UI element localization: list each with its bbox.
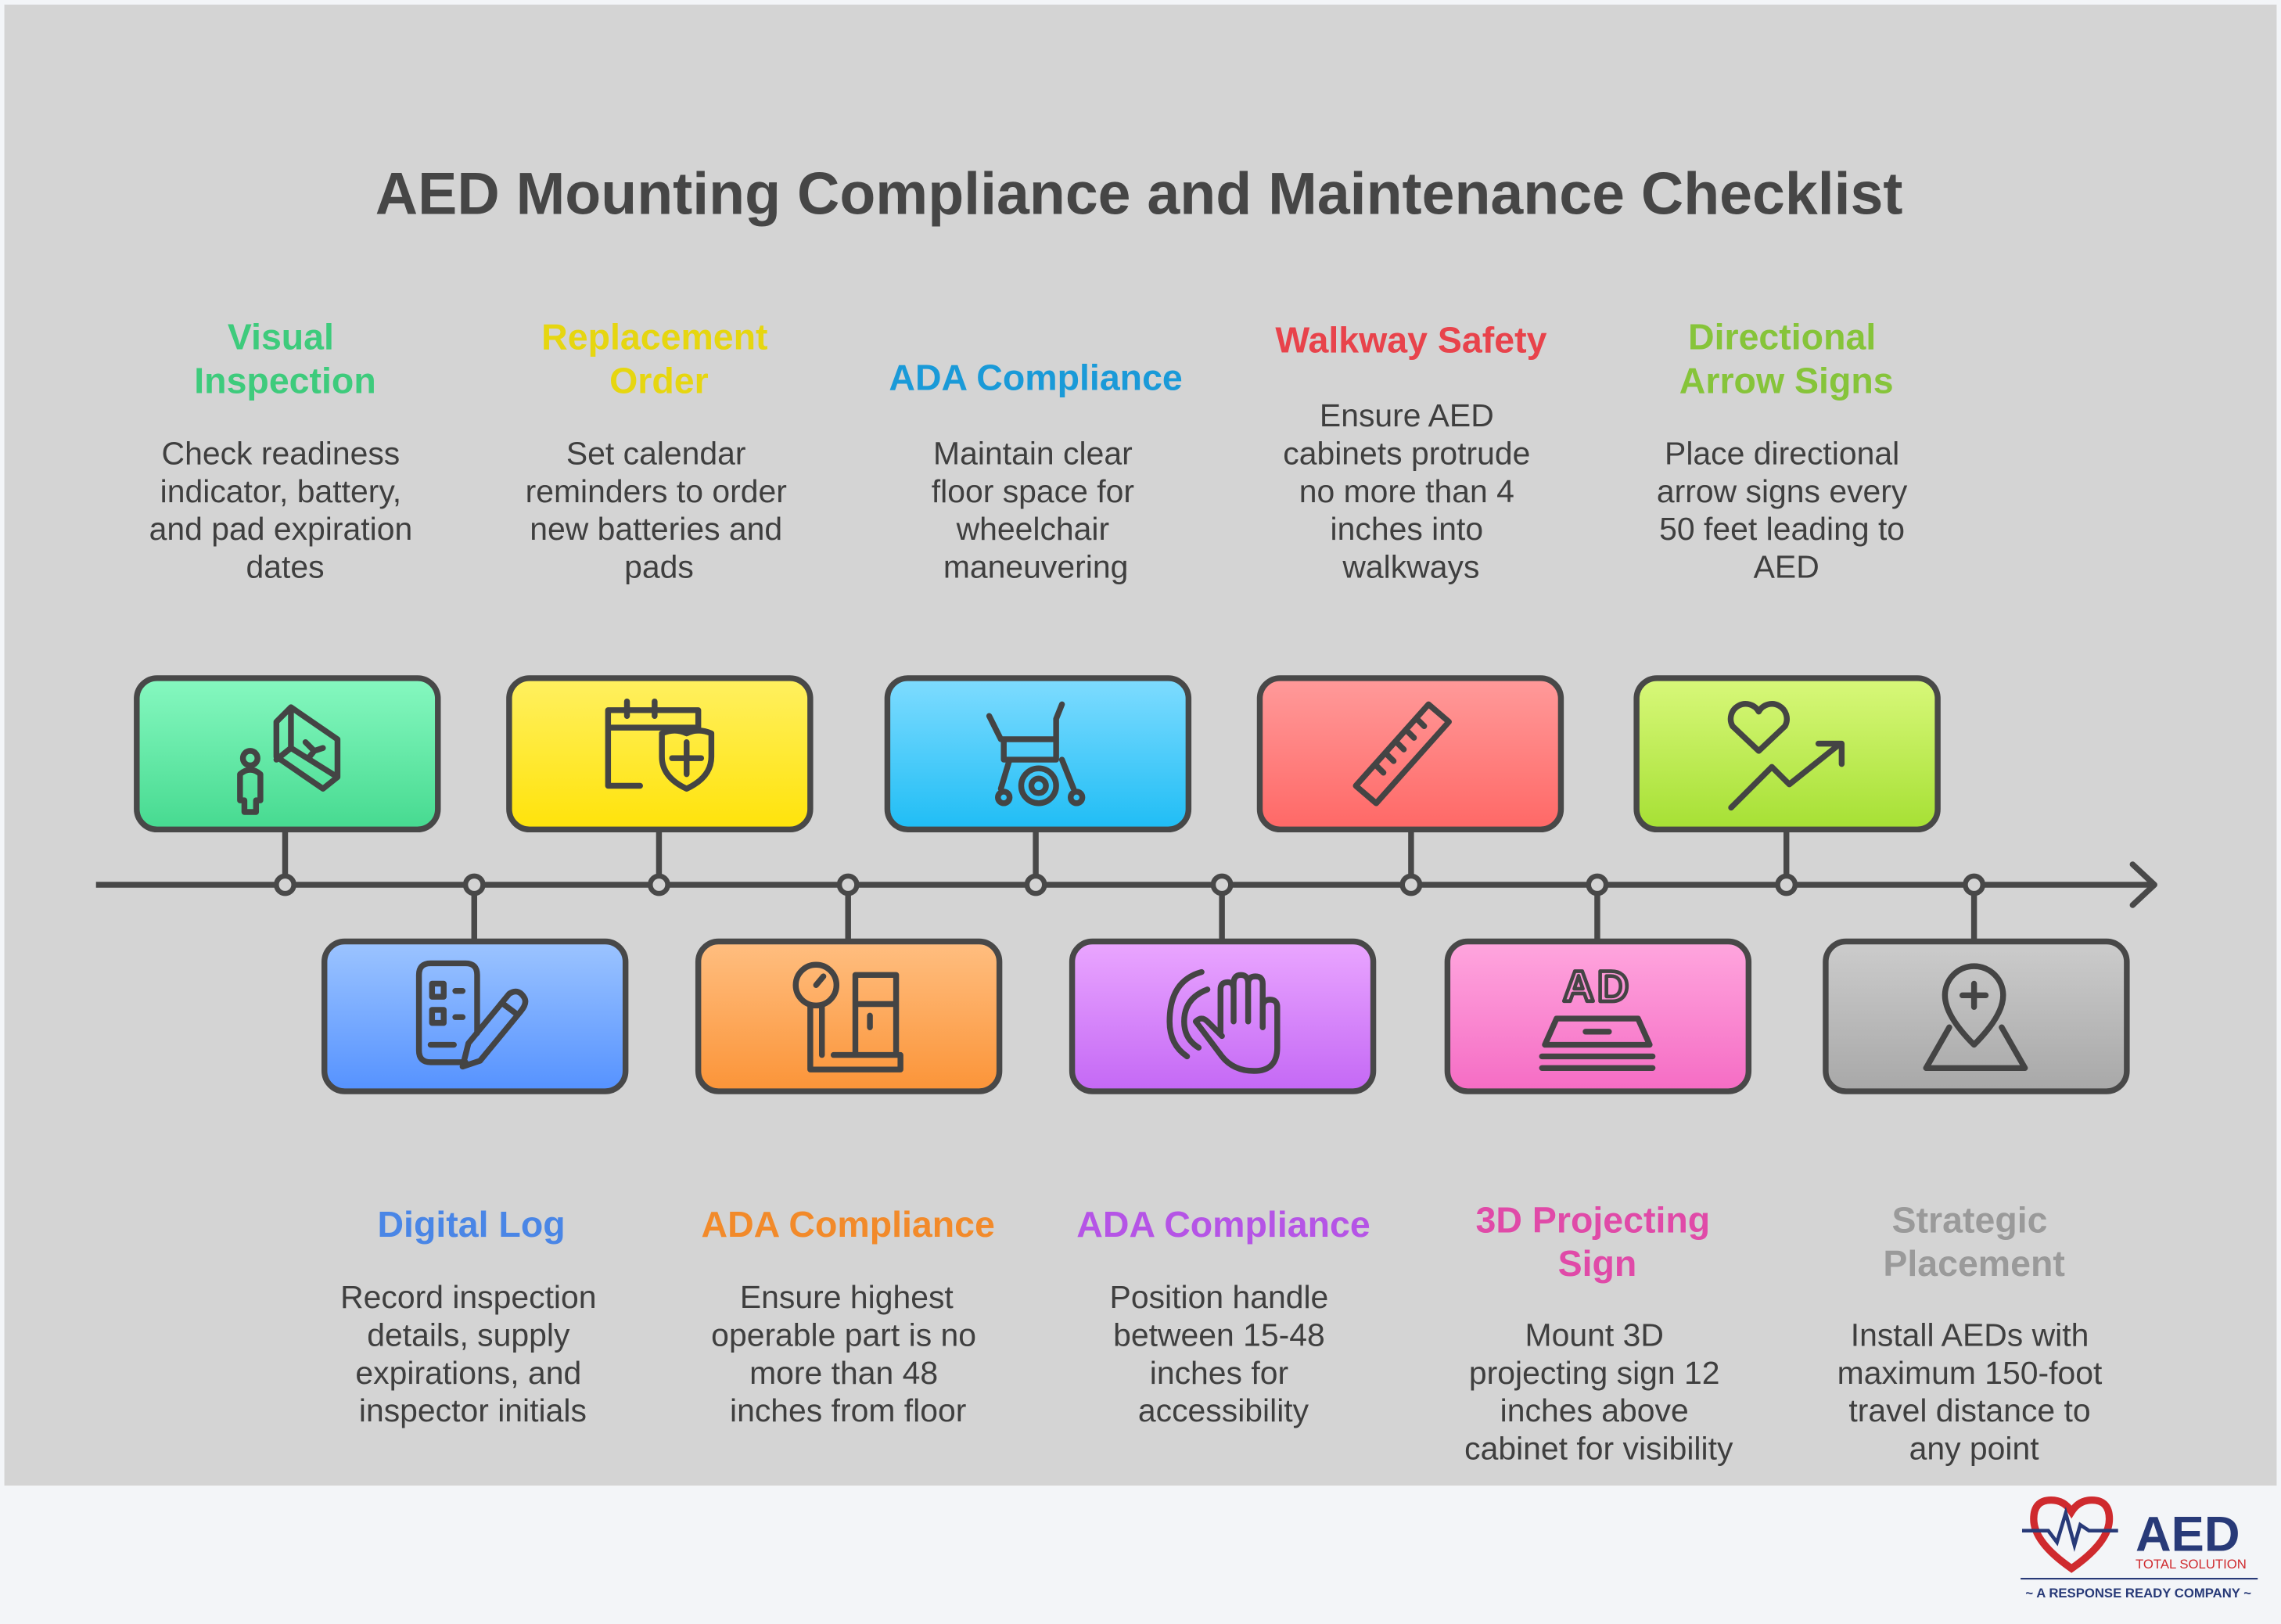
step: ADA Compliance (handle): between 15-48: [1113, 1317, 1325, 1353]
step: Replacement Order: pads: [624, 549, 694, 585]
step: Walkway Safety: no more than 4: [1299, 473, 1514, 509]
step: 3D Projecting Sign: AD: [1563, 961, 1632, 1011]
step: Digital Log: Digital Log: [377, 1204, 566, 1245]
step: ADA Compliance (floor): wheelchair: [956, 511, 1109, 547]
step: ADA Compliance (handle): Position handle: [1110, 1279, 1328, 1315]
step: Visual Inspection: indicator, battery,: [160, 473, 401, 509]
step: ADA Compliance (floor): Maintain clear: [933, 436, 1133, 472]
step: Walkway Safety: cabinets protrude: [1283, 436, 1530, 472]
step: Digital Log: details, supply: [367, 1317, 570, 1353]
title: AED Mounting Compliance and Maintenance Checklist: [375, 161, 1902, 228]
step: Replacement Order: Replacement: [541, 317, 768, 357]
step: ADA Compliance (floor): maneuvering: [943, 549, 1128, 585]
step: Directional Arrow Signs: Place directional: [1665, 436, 1899, 472]
step: Replacement Order: Set calendar: [566, 436, 746, 472]
step: Directional Arrow Signs: arrow signs every: [1657, 473, 1908, 509]
step: Strategic Placement: Strategic: [1892, 1199, 2047, 1240]
step: Walkway Safety: [1259, 319, 1561, 829]
step: Digital Log: [325, 942, 626, 1428]
step: Walkway Safety: walkways: [1342, 549, 1479, 585]
step: Strategic Placement: any point: [1909, 1431, 2039, 1467]
step: Strategic Placement: Placement: [1883, 1243, 2065, 1284]
step: 3D Projecting Sign: 3D Projecting: [1476, 1199, 1710, 1240]
logo: ~ A RESPONSE READY COMPANY ~: [2025, 1586, 2251, 1601]
step: Directional Arrow Signs: [1636, 317, 1938, 829]
step: 3D Projecting Sign: projecting sign 12: [1469, 1355, 1720, 1391]
logo: TOTAL SOLUTION: [2136, 1557, 2247, 1572]
step: ADA Compliance (height): [699, 942, 1000, 1428]
step: Directional Arrow Signs: Directional: [1688, 317, 1876, 357]
step: Visual Inspection: dates: [246, 549, 325, 585]
step: Directional Arrow Signs: Arrow Signs: [1679, 360, 1894, 401]
step: ADA Compliance (handle): ADA Compliance: [1076, 1204, 1370, 1245]
step: Replacement Order: new batteries and: [530, 511, 782, 547]
step: Visual Inspection: and pad expiration: [149, 511, 412, 547]
step: Walkway Safety: Ensure AED: [1320, 397, 1494, 433]
logo: [2021, 1500, 2258, 1601]
step: Visual Inspection: Check readiness: [162, 436, 400, 472]
step: ADA Compliance (floor): floor space for: [932, 473, 1134, 509]
step: Directional Arrow Signs: 50 feet leading to: [1659, 511, 1905, 547]
step: ADA Compliance (floor): ADA Compliance: [889, 357, 1183, 398]
step: Replacement Order: Order: [609, 360, 709, 401]
step: Directional Arrow Signs: AED: [1754, 549, 1819, 585]
step: ADA Compliance (height): operable part is no: [711, 1317, 976, 1353]
step: Strategic Placement: Install AEDs with: [1851, 1317, 2089, 1353]
step: 3D Projecting Sign: inches above: [1500, 1392, 1689, 1428]
step: ADA Compliance (height): more than 48: [749, 1355, 938, 1391]
step: ADA Compliance (height): inches from floor: [730, 1392, 966, 1428]
step: Walkway Safety: inches into: [1331, 511, 1483, 547]
step: 3D Projecting Sign: cabinet for visibility: [1464, 1431, 1733, 1467]
step: 3D Projecting Sign: Sign: [1558, 1243, 1636, 1284]
step: Replacement Order: [509, 317, 810, 829]
step: Strategic Placement: travel distance to: [1848, 1392, 2091, 1428]
step: Strategic Placement: maximum 150-foot: [1837, 1355, 2103, 1391]
step: Visual Inspection: Visual: [228, 317, 334, 357]
logo: AED: [2136, 1507, 2240, 1562]
step: ADA Compliance (floor): [887, 357, 1188, 829]
step: Visual Inspection: [137, 317, 438, 829]
step: Visual Inspection: Inspection: [194, 360, 376, 401]
step: Digital Log: Record inspection: [340, 1279, 597, 1315]
step: ADA Compliance (handle): inches for: [1150, 1355, 1288, 1391]
step: Strategic Placement: [1826, 942, 2127, 1467]
timeline: [96, 829, 2154, 942]
step: ADA Compliance (height): ADA Compliance: [702, 1204, 995, 1245]
step: Digital Log: inspector initials: [359, 1392, 587, 1428]
step: 3D Projecting Sign: Mount 3D: [1525, 1317, 1664, 1353]
step: Digital Log: expirations, and: [355, 1355, 581, 1391]
step: ADA Compliance (handle): [1072, 942, 1374, 1428]
step: Walkway Safety: Walkway Safety: [1275, 319, 1547, 360]
step: ADA Compliance (handle): accessibility: [1138, 1392, 1309, 1428]
step: Replacement Order: reminders to order: [526, 473, 787, 509]
step: 3D Projecting Sign: [1447, 942, 1748, 1467]
step: ADA Compliance (height): Ensure highest: [740, 1279, 954, 1315]
